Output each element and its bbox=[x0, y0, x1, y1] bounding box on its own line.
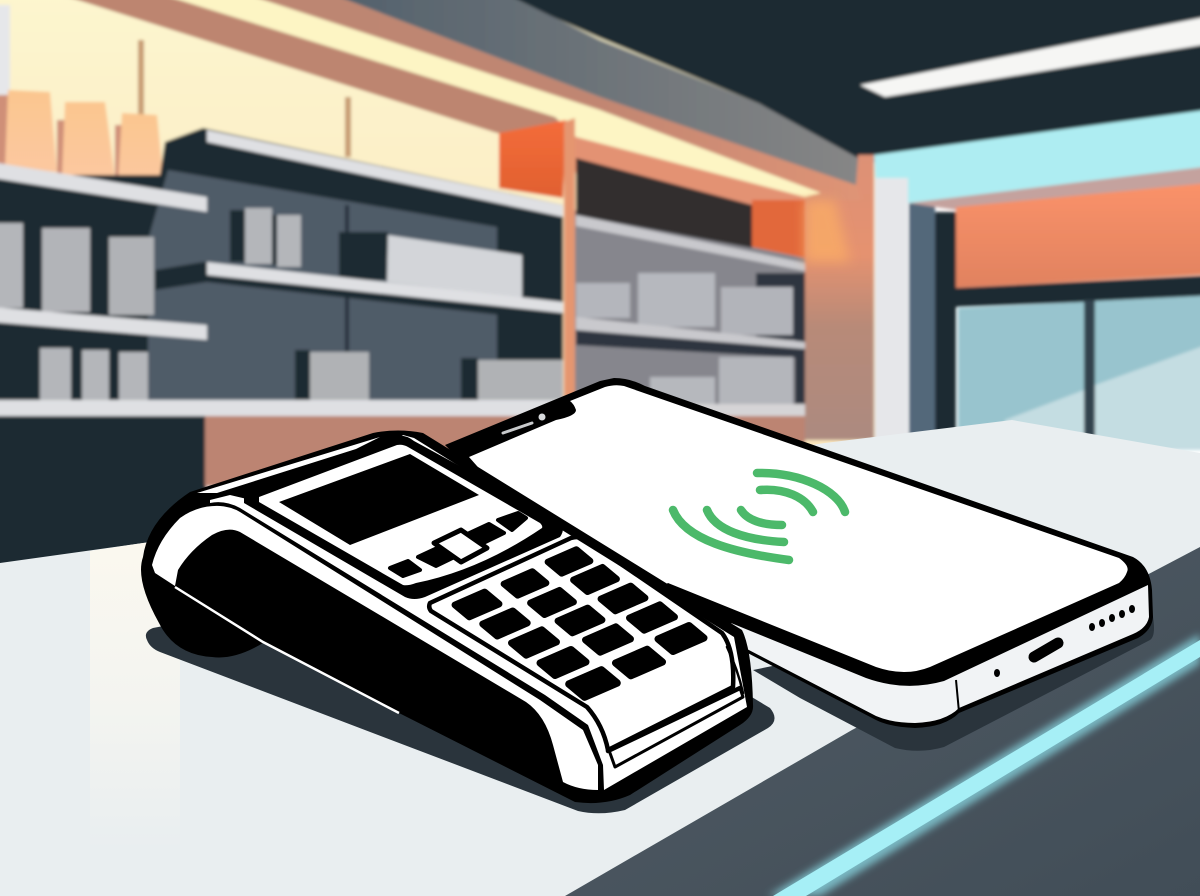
bottom base and shelf bbox=[0, 416, 206, 586]
phone seam bbox=[956, 680, 959, 712]
function buttons bbox=[390, 513, 526, 576]
white post bbox=[875, 178, 908, 458]
ceiling grey band bbox=[295, 0, 858, 185]
display bezel bbox=[244, 436, 563, 599]
counter reflection bbox=[90, 540, 180, 850]
d-pad bbox=[434, 530, 487, 562]
rim lower line bbox=[175, 587, 399, 713]
cyan strip glow bbox=[768, 634, 1200, 896]
left shelves bbox=[0, 160, 207, 212]
wall pale left edge bbox=[0, 5, 10, 95]
hangers bbox=[138, 40, 144, 115]
top sliver highlight bbox=[197, 437, 380, 493]
speaker bbox=[503, 423, 532, 433]
charging port bbox=[1034, 643, 1058, 657]
camera bbox=[538, 414, 546, 420]
terminal silhouette bbox=[141, 430, 753, 803]
terminal shadow bbox=[146, 600, 775, 813]
display screen bbox=[279, 454, 479, 545]
centre shelves bbox=[207, 130, 563, 217]
ceiling brown band upper bbox=[200, 0, 860, 200]
counter top bbox=[0, 420, 1200, 896]
dark post bbox=[935, 212, 956, 452]
ceiling brown band lower bbox=[15, 0, 576, 140]
speaker dots bbox=[1089, 605, 1135, 631]
phone bbox=[445, 378, 1153, 728]
right wall salmon bbox=[805, 155, 874, 440]
phone body bbox=[445, 378, 1153, 728]
right: cyan header bbox=[874, 108, 1200, 203]
centre boxes bbox=[230, 210, 245, 262]
payment terminal bbox=[141, 430, 753, 803]
top face bbox=[210, 435, 747, 790]
right boxes bbox=[576, 283, 630, 318]
peach boxes bbox=[0, 95, 10, 175]
contactless waves bbox=[673, 473, 845, 560]
right bay back bbox=[574, 210, 805, 420]
band below strip over right bay bbox=[566, 125, 805, 215]
phone side bbox=[731, 585, 1149, 723]
centre grey back bbox=[148, 170, 497, 400]
centre bay dark bbox=[150, 128, 563, 400]
back wall bbox=[0, 0, 880, 460]
white rim band bbox=[152, 506, 598, 790]
right shelves bbox=[576, 215, 805, 271]
card slot lip bbox=[608, 647, 743, 767]
glass bbox=[958, 302, 1084, 450]
store background bbox=[0, 0, 1200, 586]
orange window bbox=[956, 182, 1200, 288]
cyan strip bbox=[773, 640, 1200, 896]
blue grey post bbox=[909, 203, 935, 450]
keypad outline bbox=[429, 537, 733, 750]
keypad keys bbox=[455, 550, 704, 697]
dark ceiling bbox=[470, 0, 1200, 165]
post bbox=[564, 118, 575, 420]
ceiling light bbox=[860, 14, 1200, 97]
phone shadow bbox=[753, 617, 1154, 751]
centre shelf undersides bbox=[155, 262, 563, 322]
wall glow bbox=[805, 200, 850, 262]
microphone pin bbox=[994, 669, 1000, 677]
frame band bbox=[909, 165, 1200, 210]
left bay dark back bbox=[0, 175, 205, 420]
counter floor front bbox=[565, 547, 1200, 896]
phone screen bbox=[469, 385, 1128, 672]
dark transom bbox=[956, 275, 1200, 307]
left boxes bbox=[0, 223, 23, 308]
orange box bbox=[499, 120, 566, 198]
light strip cream bbox=[115, 0, 821, 197]
